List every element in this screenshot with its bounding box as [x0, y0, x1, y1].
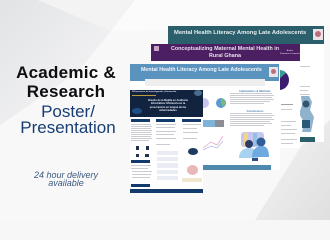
icon: brain — [187, 165, 198, 175]
dark banner: Diseño de la Mejilla en Auditoría Informática: Eficiencia en la prescripción en lengua de las enfermedades — [148, 99, 188, 112]
blue header title: Mental Health Literacy Among Late Adolescents — [141, 67, 262, 73]
subheading: Poster/Presentation — [20, 102, 116, 136]
icon: head silhouette — [188, 148, 198, 155]
panel: teal poster — [168, 26, 324, 142]
bar chart — [203, 120, 224, 127]
panel: blue poster — [130, 64, 280, 170]
teal footer box — [300, 137, 315, 142]
column 2 — [156, 119, 178, 180]
teal header title — [168, 26, 324, 44]
delivery note — [34, 170, 98, 188]
heading: Academic & Research — [16, 63, 116, 100]
dark banner — [130, 90, 203, 117]
panel: purple poster — [151, 44, 300, 148]
panel: dark blue poster — [130, 90, 203, 193]
blue header title — [130, 64, 279, 81]
delivery note: available — [48, 178, 84, 188]
section header — [131, 119, 150, 122]
subheading: Poster/Presentation: Poster/ — [41, 102, 95, 121]
purple header title: Conceptualizing Maternal Mental Health in — [171, 46, 279, 52]
authors bar — [145, 79, 265, 86]
implications heading: Implications & Methods — [239, 88, 271, 92]
column 3 — [182, 119, 202, 182]
delivery note: 24 hour delivery — [34, 170, 98, 180]
conclusions text — [230, 113, 274, 126]
subheading: Poster/Presentation: Presentation — [20, 118, 116, 136]
purple header title: Firstname Lastname — [280, 53, 300, 55]
purple text lines — [281, 104, 297, 144]
shadow strip — [280, 142, 300, 148]
blue footer bar — [203, 165, 271, 170]
line chart — [203, 136, 224, 150]
pie charts — [203, 98, 226, 108]
heading: Academic & Research: Academic & — [16, 63, 116, 82]
footer bar — [130, 189, 203, 193]
illustration: two students — [239, 132, 269, 161]
conclusions heading: Conclusions — [247, 109, 263, 113]
teal poster illustration — [300, 96, 314, 132]
purple header title — [151, 44, 300, 61]
dark banner: III Encuentro de Investigación y Desarrollo — [132, 91, 176, 93]
column 1 — [131, 119, 152, 187]
teal header title: Mental Health Literacy Among Late Adolescents — [174, 30, 306, 36]
purple header title: Author — [287, 50, 293, 52]
implications text — [230, 93, 274, 104]
heading: Academic & Research: Research — [27, 82, 105, 100]
pie chart — [280, 70, 289, 90]
purple header title: Rural Ghana — [209, 53, 241, 59]
